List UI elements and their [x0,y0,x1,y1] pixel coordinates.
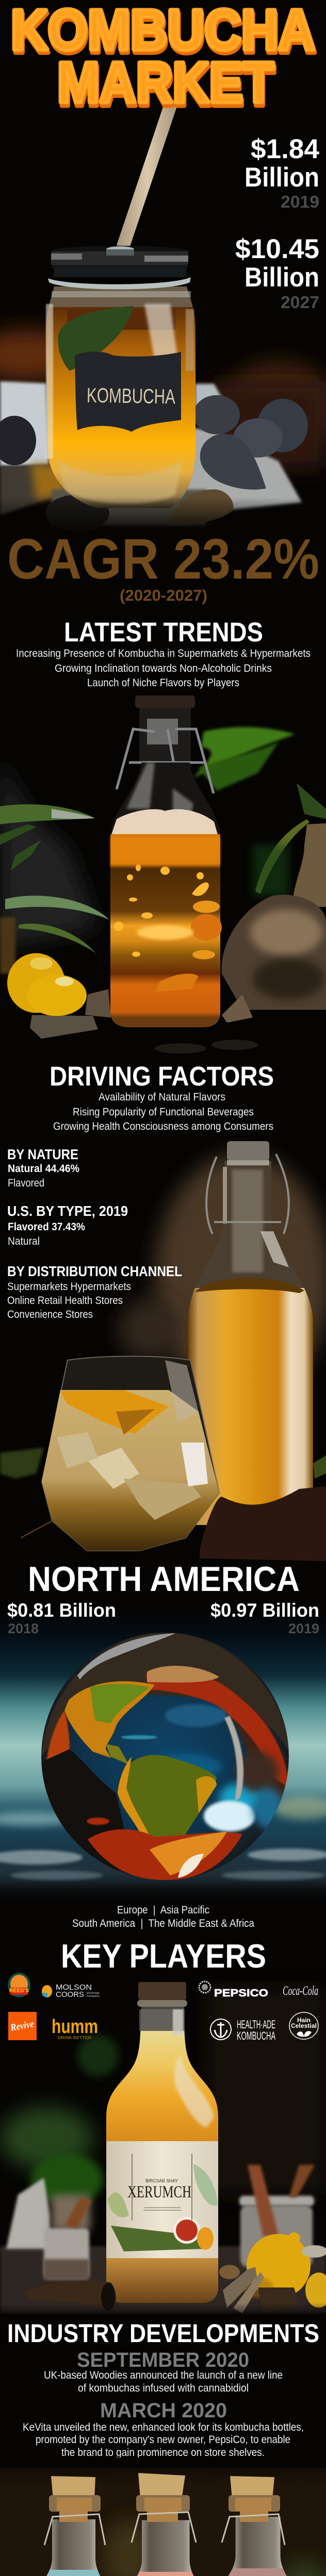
September 2020: SEPTEMBER 2020 [77,2349,249,2371]
bottle: mauve [228,2517,287,2576]
bottle label [106,2141,218,2258]
foliage and cloth [0,1448,326,1561]
globe in water image [0,1607,326,1906]
US by type: Flavored 37.43% [8,1221,85,1233]
backdrop glow [0,330,326,469]
September 2020: UK-based Woodies announced the launch of a new line [44,2369,283,2381]
2019 value [210,1600,319,1636]
title bevel: MARKET [57,51,274,114]
Pacific lava [46,1710,70,1762]
red band [145,1669,289,1788]
2027 value: Billion [244,262,319,293]
floating bubbles [114,864,222,992]
background plants and rocks [0,727,326,1054]
dark Pacific [41,1749,124,1870]
title bevel [11,0,315,114]
September 2020: of kombuchas infused with cannabidiol [78,2382,249,2394]
straw [117,98,178,249]
factor list: Availability of Natural Flavors [99,1091,225,1103]
segment details [7,1146,182,1320]
2019 value: 2019 [281,192,319,211]
developments image: three flower bottles [0,2458,326,2576]
March 2020: the brand to gain prominence on store shelves. [61,2447,265,2459]
hero image: kombucha jar with figs [0,98,326,536]
logo: Hain Celestial [289,2012,318,2039]
jar body [45,286,196,508]
trends image: fermenting bottle [0,696,326,1054]
by nature: Natural 44.46% [8,1163,79,1175]
label small print: BIRCSAB SHAY [145,2178,178,2183]
2027 value: 2027 [281,293,319,312]
lemons [7,953,87,1016]
title face [11,0,315,114]
trend list: Launch of Niche Flavors by Players [87,677,239,689]
driving factors [50,1061,274,1132]
market size figures [235,134,320,312]
logo: Reed's: REED'S [9,1988,29,1994]
by nature: Flavored [8,1177,44,1189]
bright currents [219,1783,266,1814]
North America [64,1681,155,1758]
industry developments [7,2319,319,2459]
2027 value [235,234,319,312]
logo: Molson Coors: beverage [87,1992,100,1995]
dark upper hemisphere [41,1632,289,1756]
South America [118,1755,217,1837]
by distribution channel [7,1263,182,1320]
backdrop and table [0,2458,326,2576]
by distribution channel: Online Retail Health Stores [7,1295,123,1307]
factor list: Growing Health Consciousness among Consumers [53,1121,273,1132]
key players image: labelled bottle on table [0,1982,326,2321]
title face: MARKET [57,51,274,114]
label art [107,2154,218,2251]
bottle cap and clasp [117,696,214,793]
other regions list: South America | The Middle East & Africa [72,1918,254,1929]
logo: Hain Celestial: Hain [297,2016,311,2024]
logo: Revive [8,2012,37,2040]
2019 value: 2019 [288,1621,319,1636]
2019 value: Billion [244,162,319,193]
bottle: teal [46,2519,100,2576]
March 2020 [23,2399,304,2459]
other regions list: Europe | Asia Pacific [117,1904,209,1916]
2027 value: $10.45 [235,234,319,264]
title extrusion: MARKET [58,55,275,118]
logo: Hain Celestial: Celestial [291,2022,317,2029]
liquid [110,834,220,1027]
latest trends [16,617,311,689]
March 2020: promoted by the company's new owner, PepsiCo, to enable [36,2434,290,2446]
heading: DRIVING FACTORS [50,1061,274,1092]
logo: Health-Ade: KOMBUCHA [237,2029,275,2042]
key players heading: KEY PLAYERS [61,1937,266,1975]
US by type: U.S. BY TYPE, 2019 [7,1203,128,1219]
logo: Health-Ade: HEALTH·ADE [237,2018,275,2031]
2019 value [244,134,320,211]
2018 value: 2018 [8,1621,39,1636]
September 2020 [44,2349,283,2394]
trend list [16,648,311,689]
US by type [7,1203,128,1247]
jar lid [48,246,191,290]
logo: Health-Ade [210,2018,275,2042]
logo: Reed's [8,1973,30,1997]
water background [0,1607,326,1901]
figs [0,395,308,532]
bottle glass [110,762,220,1027]
factor list [53,1091,273,1132]
2019 value: $0.97 Billion [210,1600,319,1621]
bottle [106,1982,218,2303]
north america values [7,1600,319,1636]
trend list: Growing Inclination towards Non-Alcoholic Drinks [55,663,272,674]
chalkboard label: KOMBUCHA [87,384,176,409]
segments image: bottle and glass [0,1141,326,1561]
by nature [7,1146,79,1189]
by nature: BY NATURE [7,1146,78,1162]
blurred backdrop [0,1989,326,2313]
table fade [0,2303,326,2321]
by distribution channel: Supermarkets Hypermarkets [7,1281,131,1293]
March 2020: MARCH 2020 [100,2399,227,2422]
2018 value [7,1600,116,1636]
top yeast band [111,837,220,865]
logo: Molson Coors: company [87,1995,100,1998]
globe [41,1632,290,1880]
key player logos [8,1973,318,2042]
bottle: red [137,2520,194,2576]
2019 value: $1.84 [251,134,320,164]
leaf [58,306,133,371]
white cloth [0,381,302,526]
logo: PepsiCo: PEPSICO [214,1988,268,1999]
corks and wire clasps [44,2473,285,2545]
north america heading: NORTH AMERICA [28,1560,300,1599]
title [11,0,316,118]
logo: Revive: Revive [9,2019,35,2033]
logo: humm: DRINK BETTER [58,2036,91,2040]
US by type: Natural [8,1235,40,1247]
by distribution channel: Convenience Stores [7,1309,93,1320]
logo: Molson Coors: MOLSON [56,1983,92,1992]
glass highlight [126,762,193,819]
other regions list [72,1904,254,1929]
foam [111,809,218,835]
title extrusion [12,2,316,118]
swing-top bottle [188,1141,313,1525]
logo: Molson Coors: COORS [56,1990,84,1999]
label brand: XERUMCH [127,2183,191,2201]
bottom fade [0,497,326,536]
chalkboard label [75,351,181,432]
tumbler with ice and lemon [21,1356,219,1551]
logo: humm: humm [52,2016,98,2038]
heading: LATEST TRENDS [64,617,263,648]
lemons and cinnamon [25,2232,326,2313]
brown right side [227,1714,288,1810]
smoky backdrop [119,1154,326,1401]
glass reflection [77,1633,175,1680]
Atlantic swirl [165,1704,227,1727]
bottom fade [0,1880,326,1906]
logo: PepsiCo [199,1981,268,1999]
by distribution channel: BY DISTRIBUTION CHANNEL [7,1263,182,1279]
2018 value: $0.81 Billion [7,1600,116,1621]
factor list: Rising Popularity of Functional Beverages [73,1106,254,1118]
CAGR [7,528,319,604]
lower lava [88,1829,242,1880]
logo: Molson Coors [42,1983,100,1999]
CAGR period: (2020-2027) [120,586,207,604]
March 2020: KeVita unveiled the new, enhanced look for its kombucha bottles, [23,2421,304,2433]
